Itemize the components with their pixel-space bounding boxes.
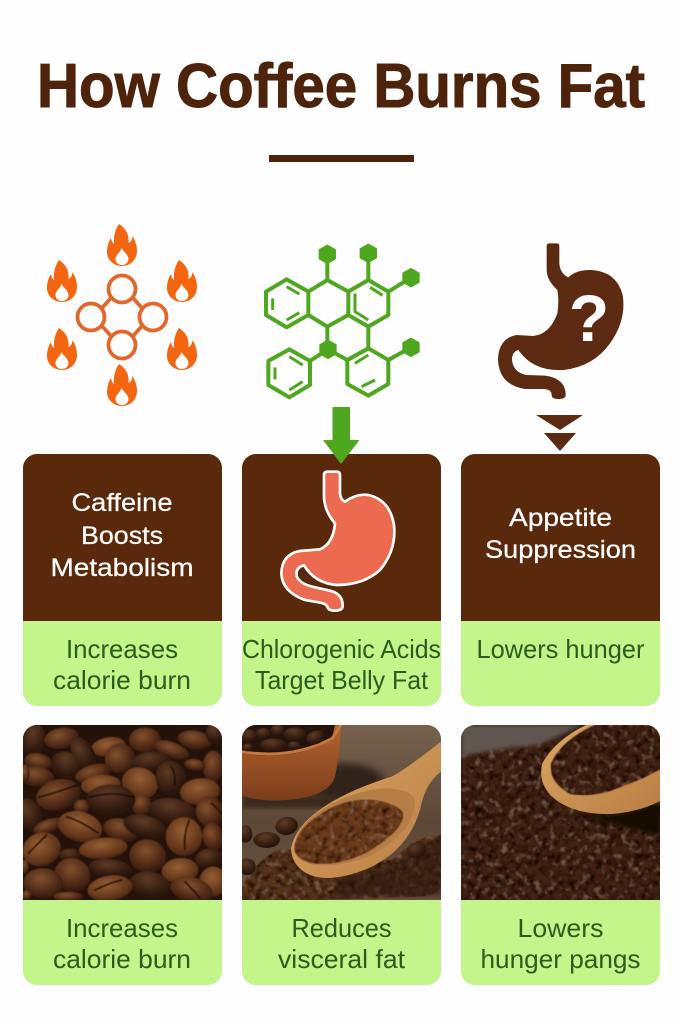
caption: calorie burn xyxy=(53,665,191,695)
caption: Increases xyxy=(66,913,178,943)
caption: Reduces xyxy=(292,913,392,943)
panel header xyxy=(461,454,660,621)
heading: Boosts xyxy=(81,522,163,550)
icon: double down chevrons xyxy=(536,415,583,451)
title: How Coffee Burns Fat xyxy=(37,52,645,121)
panel: appetite suppression xyxy=(461,454,660,706)
panel: coffee powder photo card xyxy=(238,724,442,985)
icon: stomach with question mark xyxy=(498,243,623,399)
icon: stomach with question mark: ? xyxy=(569,281,609,355)
panel footer xyxy=(23,621,222,706)
caption: Lowers hunger xyxy=(476,634,645,664)
heading: Caffeine xyxy=(72,489,172,517)
panel: coffee beans photo card xyxy=(13,722,228,985)
caption xyxy=(480,913,640,974)
panel footer xyxy=(242,621,441,706)
caption xyxy=(53,913,191,974)
heading: Suppression xyxy=(485,536,636,564)
panel header xyxy=(242,454,441,621)
photo: roasted coffee beans xyxy=(23,725,222,900)
panel: caffeine boosts metabolism xyxy=(23,454,222,706)
caption: visceral fat xyxy=(278,944,406,974)
caption: hunger pangs xyxy=(480,944,640,974)
heading: Metabolism xyxy=(50,554,194,582)
caption bar xyxy=(461,900,660,985)
caption: Lowers xyxy=(518,913,604,943)
heading xyxy=(50,489,194,582)
icon: metabolism flames and molecule xyxy=(47,224,197,406)
caption bar xyxy=(242,900,441,985)
panel header xyxy=(23,454,222,621)
caption: Target Belly Fat xyxy=(255,665,429,695)
icon: flames ring xyxy=(47,224,197,406)
arrow: green down arrow xyxy=(323,407,360,464)
caption: calorie burn xyxy=(53,944,191,974)
caption: Chlorogenic Acids xyxy=(242,634,441,664)
title rule xyxy=(269,155,414,162)
heading: Appetite xyxy=(509,504,612,532)
icon: four-node molecule xyxy=(78,276,166,358)
photo: wooden spoon with coffee powder xyxy=(238,724,442,902)
icon: chlorogenic acid molecule xyxy=(266,245,419,397)
caption: Increases xyxy=(66,634,178,664)
caption bar xyxy=(23,900,222,985)
panel: coffee grounds photo card xyxy=(461,725,662,985)
caption xyxy=(278,913,406,974)
panel footer xyxy=(461,621,660,706)
photo: coffee grounds with scoop xyxy=(461,725,662,901)
caption xyxy=(242,634,441,695)
panel: chlorogenic acids xyxy=(242,454,441,706)
caption xyxy=(53,634,191,695)
heading xyxy=(485,504,636,564)
icon: red stomach xyxy=(281,472,394,611)
